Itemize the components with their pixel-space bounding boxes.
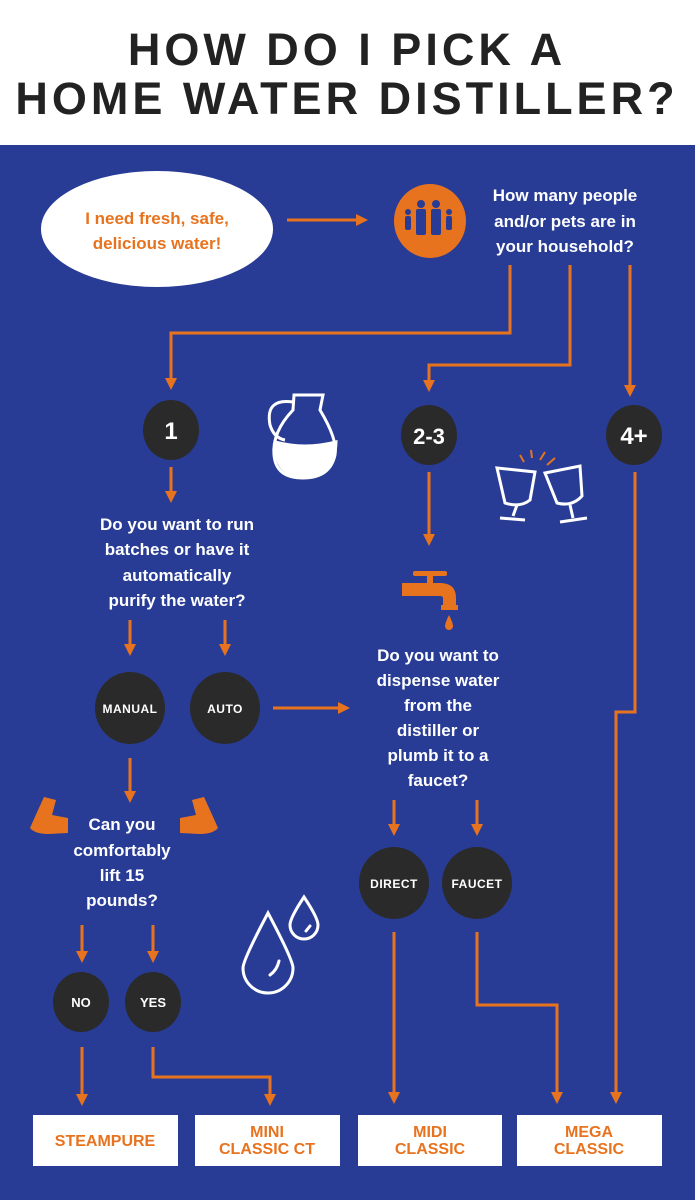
question: batches or auto: purify the water? bbox=[109, 591, 245, 610]
arrow: auto to dispense bbox=[273, 706, 344, 710]
question: lift 15 pounds bbox=[73, 815, 171, 910]
circle: yes bbox=[125, 972, 181, 1032]
icon: muscles bbox=[30, 797, 218, 834]
question: batches or auto: automatically bbox=[123, 566, 232, 585]
question: lift 15 pounds: pounds? bbox=[86, 891, 158, 910]
arrow: to 1 bbox=[171, 265, 510, 384]
circle: 1: 1 bbox=[164, 418, 178, 445]
circle: 4+: 4+ bbox=[620, 423, 648, 450]
icon: jug bbox=[269, 395, 336, 478]
question: dispense or faucet: dispense water bbox=[377, 671, 500, 690]
question: dispense or faucet bbox=[377, 646, 500, 790]
question: dispense or faucet: distiller or bbox=[397, 721, 479, 740]
arrow: to 4+ bbox=[628, 265, 632, 391]
arrow: to yes bbox=[152, 925, 154, 957]
question: lift 15 pounds: comfortably bbox=[73, 841, 171, 860]
household question bbox=[493, 186, 637, 256]
box: mega classic bbox=[517, 1115, 662, 1166]
arrow: start to household bbox=[287, 218, 362, 222]
box: mini classic ct: MINI bbox=[250, 1124, 284, 1141]
arrow: yes to mini bbox=[153, 1047, 270, 1100]
box: mini classic ct: CLASSIC CT bbox=[219, 1141, 315, 1158]
arrow: direct to midi bbox=[392, 932, 396, 1098]
start ellipse bbox=[41, 171, 273, 287]
box: mega classic: MEGA bbox=[565, 1124, 613, 1141]
start ellipse: I need fresh, safe, bbox=[85, 209, 229, 228]
question: dispense or faucet: Do you want to bbox=[377, 646, 499, 665]
icon: wine glasses bbox=[497, 450, 587, 522]
box: mega classic: CLASSIC bbox=[554, 1141, 625, 1158]
question: dispense or faucet: faucet? bbox=[408, 771, 468, 790]
box: steampure: STEAMPURE bbox=[55, 1133, 156, 1150]
icon: faucet bbox=[402, 571, 458, 630]
question: batches or auto: batches or have it bbox=[105, 540, 250, 559]
box: midi classic: CLASSIC bbox=[395, 1141, 466, 1158]
household question: and/or pets are in bbox=[494, 212, 636, 231]
circle: faucet bbox=[442, 847, 512, 919]
household question: your household? bbox=[496, 237, 634, 256]
box: mini classic ct bbox=[195, 1115, 340, 1166]
arrow: no to steampure bbox=[80, 1047, 84, 1100]
question: batches or auto bbox=[100, 515, 254, 610]
question: batches or auto: Do you want to run bbox=[100, 515, 254, 534]
question: lift 15 pounds: lift 15 bbox=[100, 866, 144, 885]
start ellipse: delicious water! bbox=[93, 234, 221, 253]
arrow: to manual bbox=[128, 620, 132, 650]
question: dispense or faucet: from the bbox=[404, 696, 472, 715]
question: lift 15 pounds: Can you bbox=[88, 815, 156, 834]
household question: How many people bbox=[493, 186, 637, 205]
icon: water drops bbox=[243, 897, 318, 993]
circle: 4+ bbox=[606, 405, 662, 465]
circle: direct bbox=[359, 847, 429, 919]
circle: manual bbox=[95, 672, 165, 744]
circle: 1 bbox=[143, 400, 199, 460]
circle: auto bbox=[190, 672, 260, 744]
arrow: to auto bbox=[224, 620, 226, 650]
arrow: to 2-3 bbox=[429, 265, 570, 386]
title: HOME WATER DISTILLER? bbox=[15, 73, 679, 124]
circle: yes: YES bbox=[140, 995, 166, 1010]
box: midi classic bbox=[358, 1115, 502, 1166]
circle: 2-3 bbox=[401, 405, 457, 465]
arrow: 1 down bbox=[170, 467, 172, 497]
arrow: to direct bbox=[392, 800, 396, 830]
icon: family bbox=[394, 184, 466, 258]
circle: faucet: FAUCET bbox=[452, 877, 503, 891]
box: midi classic: MIDI bbox=[413, 1124, 447, 1141]
title: HOW DO I PICK A bbox=[128, 24, 566, 75]
circle: manual: MANUAL bbox=[102, 702, 158, 716]
circle: no: NO bbox=[71, 995, 91, 1010]
box: steampure bbox=[33, 1115, 178, 1166]
arrow: 4+ to mega bbox=[616, 472, 635, 1098]
circle: no bbox=[53, 972, 109, 1032]
circle: auto: AUTO bbox=[207, 702, 243, 716]
circle: 2-3: 2-3 bbox=[413, 424, 445, 449]
title bbox=[15, 24, 679, 124]
arrow: manual down bbox=[128, 758, 132, 797]
question: dispense or faucet: plumb it to a bbox=[387, 746, 489, 765]
arrow: to no bbox=[80, 925, 84, 957]
arrow: faucet to mega bbox=[477, 932, 557, 1098]
arrow: 2-3 down bbox=[428, 472, 430, 540]
arrow: to faucet bbox=[476, 800, 478, 830]
circle: direct: DIRECT bbox=[370, 877, 418, 891]
